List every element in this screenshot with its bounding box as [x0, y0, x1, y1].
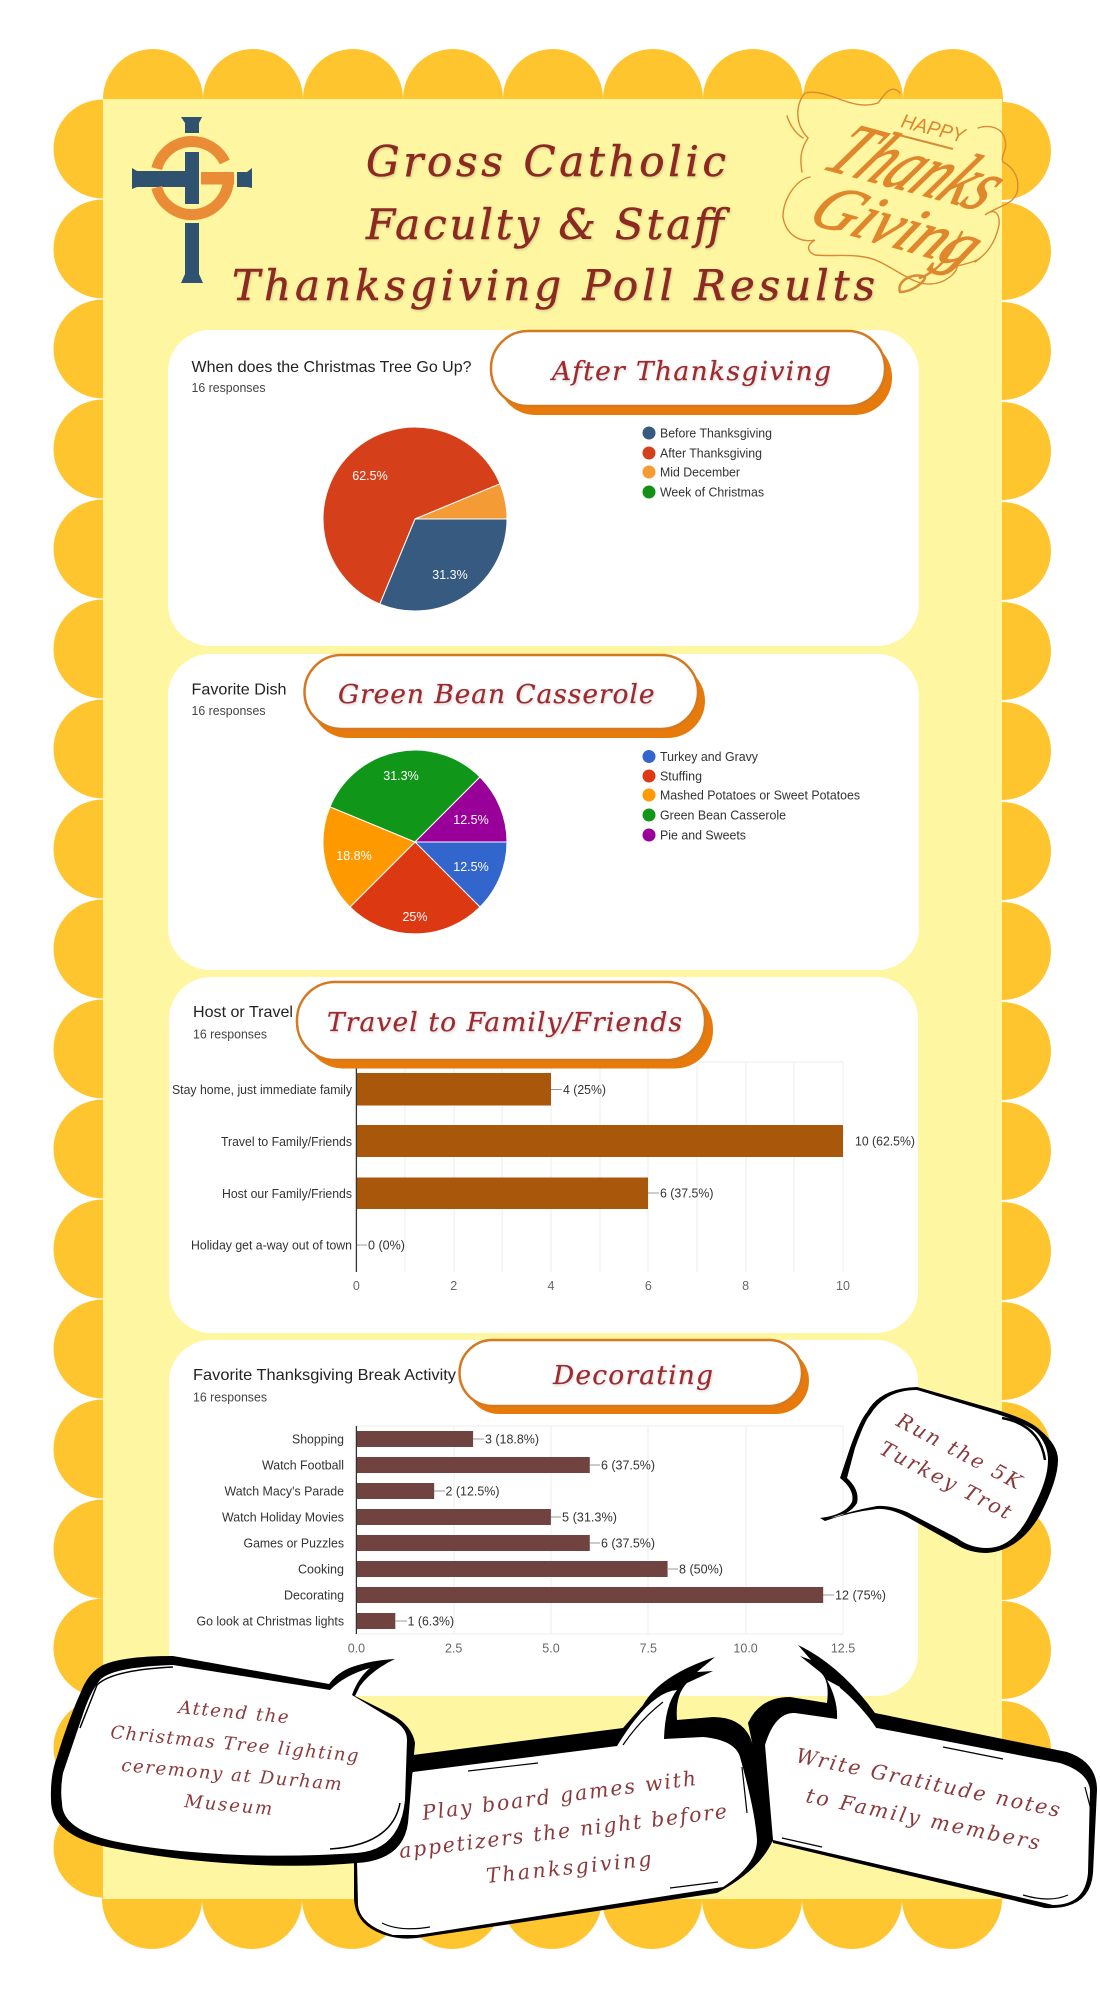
- bubble text: Christmas Tree lighting: [110, 1722, 359, 1767]
- bar chart: favorite activity: Watch Football: [262, 1458, 344, 1472]
- bubble text: Thanksgiving: [485, 1847, 653, 1888]
- pie chart: favorite dish: 12.5%: [453, 860, 489, 874]
- bubble text: [398, 1766, 728, 1888]
- legend: favorite dish: Turkey and Gravy: [660, 749, 758, 764]
- bar chart: favorite activity: Go look at Christmas lights: [196, 1614, 344, 1628]
- bar chart: host or travel: Host our Family/Friends: [222, 1187, 352, 1201]
- bar chart: host or travel: 0: [353, 1279, 360, 1293]
- bar chart: host or travel: [172, 1062, 915, 1293]
- heading: favorite dish: Favorite Dish: [192, 682, 286, 698]
- panel: christmas tree poll: [168, 330, 919, 646]
- legend: favorite dish: Mashed Potatoes or Sweet Potatoes: [660, 788, 860, 802]
- bar chart: favorite activity: 3 (18.8%): [485, 1432, 539, 1446]
- bar chart: favorite activity: 12.5: [831, 1642, 855, 1656]
- bar chart: favorite activity: Cooking: [298, 1562, 344, 1576]
- bar chart: favorite activity: Games or Puzzles: [244, 1536, 344, 1550]
- bar chart: host or travel: 0 (0%): [368, 1238, 405, 1252]
- bubble text: Museum: [183, 1791, 273, 1820]
- title: Thanksgiving Poll Results: [232, 261, 875, 310]
- cream inner panel: [103, 99, 1002, 1899]
- bubble text: [110, 1697, 359, 1820]
- heading: christmas tree question: When does the Christmas Tree Go Up?: [192, 359, 472, 376]
- panel: favorite activity poll: [169, 1340, 918, 1696]
- pie chart: favorite dish: 31.3%: [383, 769, 419, 783]
- pie chart: favorite dish: [323, 750, 507, 934]
- pie chart: favorite dish: 25%: [402, 910, 428, 924]
- title: Faculty & Staff: [365, 200, 730, 249]
- legend: favorite dish: [642, 749, 860, 842]
- bubble text: Play board games with: [420, 1766, 697, 1825]
- bubble text: Write Gratitude notes: [794, 1743, 1062, 1822]
- legend: christmas tree: After Thanksgiving: [660, 446, 762, 460]
- bar chart: favorite activity: 12 (75%): [835, 1588, 886, 1602]
- bar chart: favorite activity: 5 (31.3%): [562, 1510, 617, 1524]
- bubble text: Run the 5K: [892, 1408, 1027, 1495]
- bar chart: host or travel: 6: [645, 1279, 652, 1293]
- bar chart: favorite activity: 2 (12.5%): [446, 1484, 500, 1498]
- bar chart: favorite activity: 6 (37.5%): [601, 1458, 655, 1472]
- callout: decorating: Decorating: [552, 1360, 713, 1391]
- legend: christmas tree: Mid December: [660, 464, 741, 480]
- bar chart: host or travel: 10 (62.5%): [855, 1134, 915, 1148]
- bubble text: to Family members: [804, 1783, 1042, 1855]
- speech bubble: write gratitude notes: [748, 1645, 1097, 1908]
- speech bubble: play board games: [354, 1657, 773, 1939]
- bar chart: host or travel: 8: [742, 1279, 749, 1293]
- speech bubble: run the 5K: [820, 1387, 1058, 1553]
- callout: after thanksgiving: [491, 331, 892, 415]
- bar chart: favorite activity: Watch Macy's Parade: [224, 1484, 344, 1498]
- icon: Happy Thanksgiving lettering: Giving: [796, 171, 1001, 280]
- response count: 16 responses: [193, 1028, 267, 1042]
- legend: christmas tree: Before Thanksgiving: [660, 426, 772, 440]
- bar chart: favorite activity: 10.0: [733, 1642, 758, 1656]
- bar chart: favorite activity: 1 (6.3%): [408, 1614, 454, 1628]
- callout: green bean casserole: Green Bean Casserole: [338, 679, 654, 710]
- legend: favorite dish: Pie and Sweets: [660, 828, 746, 842]
- legend: christmas tree: Week of Christmas: [660, 484, 764, 500]
- panel: favorite dish poll: [168, 654, 919, 970]
- bubble text: [876, 1408, 1027, 1525]
- icon: school cross logo: [132, 117, 252, 283]
- pie chart: christmas tree: 62.5%: [352, 469, 388, 483]
- bar chart: host or travel: Stay home, just immediate family: [172, 1083, 353, 1097]
- icon: Happy Thanksgiving lettering: Thanks: [808, 109, 1029, 225]
- callout: decorating: [460, 1340, 809, 1414]
- icon: Happy Thanksgiving lettering: HAPPY: [899, 111, 969, 148]
- response count: 16 responses: [192, 381, 266, 395]
- callout: travel to family/friends: Travel to Family/Friends: [327, 1007, 682, 1038]
- pie chart: christmas tree: 31.3%: [432, 568, 468, 582]
- pie chart: christmas tree: [323, 427, 507, 611]
- bar chart: favorite activity: 7.5: [640, 1642, 657, 1656]
- legend: favorite dish: Green Bean Casserole: [660, 808, 786, 822]
- legend: favorite dish: Stuffing: [660, 768, 702, 784]
- pie chart: favorite dish: 18.8%: [336, 849, 372, 863]
- response count: 16 responses: [192, 704, 266, 718]
- bar chart: host or travel: 4: [548, 1279, 555, 1293]
- bar chart: favorite activity: 5.0: [542, 1642, 560, 1656]
- callout: travel to family/friends: [297, 982, 713, 1068]
- pie chart: favorite dish: 12.5%: [453, 813, 489, 827]
- bar chart: host or travel: 2: [450, 1279, 457, 1293]
- callout: after thanksgiving: After Thanksgiving: [549, 356, 831, 387]
- bar chart: favorite activity: Decorating: [284, 1588, 344, 1602]
- bar chart: host or travel: 10: [836, 1279, 850, 1293]
- bar chart: host or travel: Holiday get a-way out of town: [191, 1238, 352, 1252]
- bubble text: appetizers the night before: [398, 1799, 728, 1863]
- legend: christmas tree: [642, 426, 772, 500]
- response count: 16 responses: [193, 1390, 267, 1404]
- icon: Happy Thanksgiving lettering: [783, 89, 1029, 292]
- bar chart: favorite activity: [196, 1426, 886, 1656]
- bar chart: favorite activity: Shopping: [292, 1432, 344, 1446]
- title: Gross Catholic: [366, 137, 726, 186]
- bar chart: favorite activity: 6 (37.5%): [601, 1536, 655, 1550]
- bar chart: favorite activity: Watch Holiday Movies: [222, 1510, 344, 1524]
- heading: favorite activity: Favorite Thanksgiving Break Activity: [193, 1367, 456, 1384]
- bar chart: host or travel: 6 (37.5%): [660, 1186, 714, 1200]
- bar chart: favorite activity: 0.0: [348, 1642, 365, 1656]
- bar chart: host or travel: Travel to Family/Friends: [221, 1135, 352, 1149]
- title: [232, 137, 875, 310]
- bubble text: Attend the: [176, 1697, 290, 1728]
- heading: host or travel: Host or Travel: [193, 1004, 293, 1021]
- bar chart: favorite activity: 8 (50%): [679, 1562, 723, 1576]
- bubble text: Turkey Trot: [876, 1436, 1016, 1525]
- bubble text: ceremony at Durham: [121, 1755, 343, 1795]
- panel: host or travel poll: [169, 977, 918, 1333]
- callout: green bean casserole: [304, 655, 705, 738]
- bar chart: host or travel: 4 (25%): [563, 1083, 606, 1097]
- bar chart: favorite activity: 2.5: [445, 1642, 462, 1656]
- speech bubble: attend christmas tree lighting: [51, 1656, 415, 1866]
